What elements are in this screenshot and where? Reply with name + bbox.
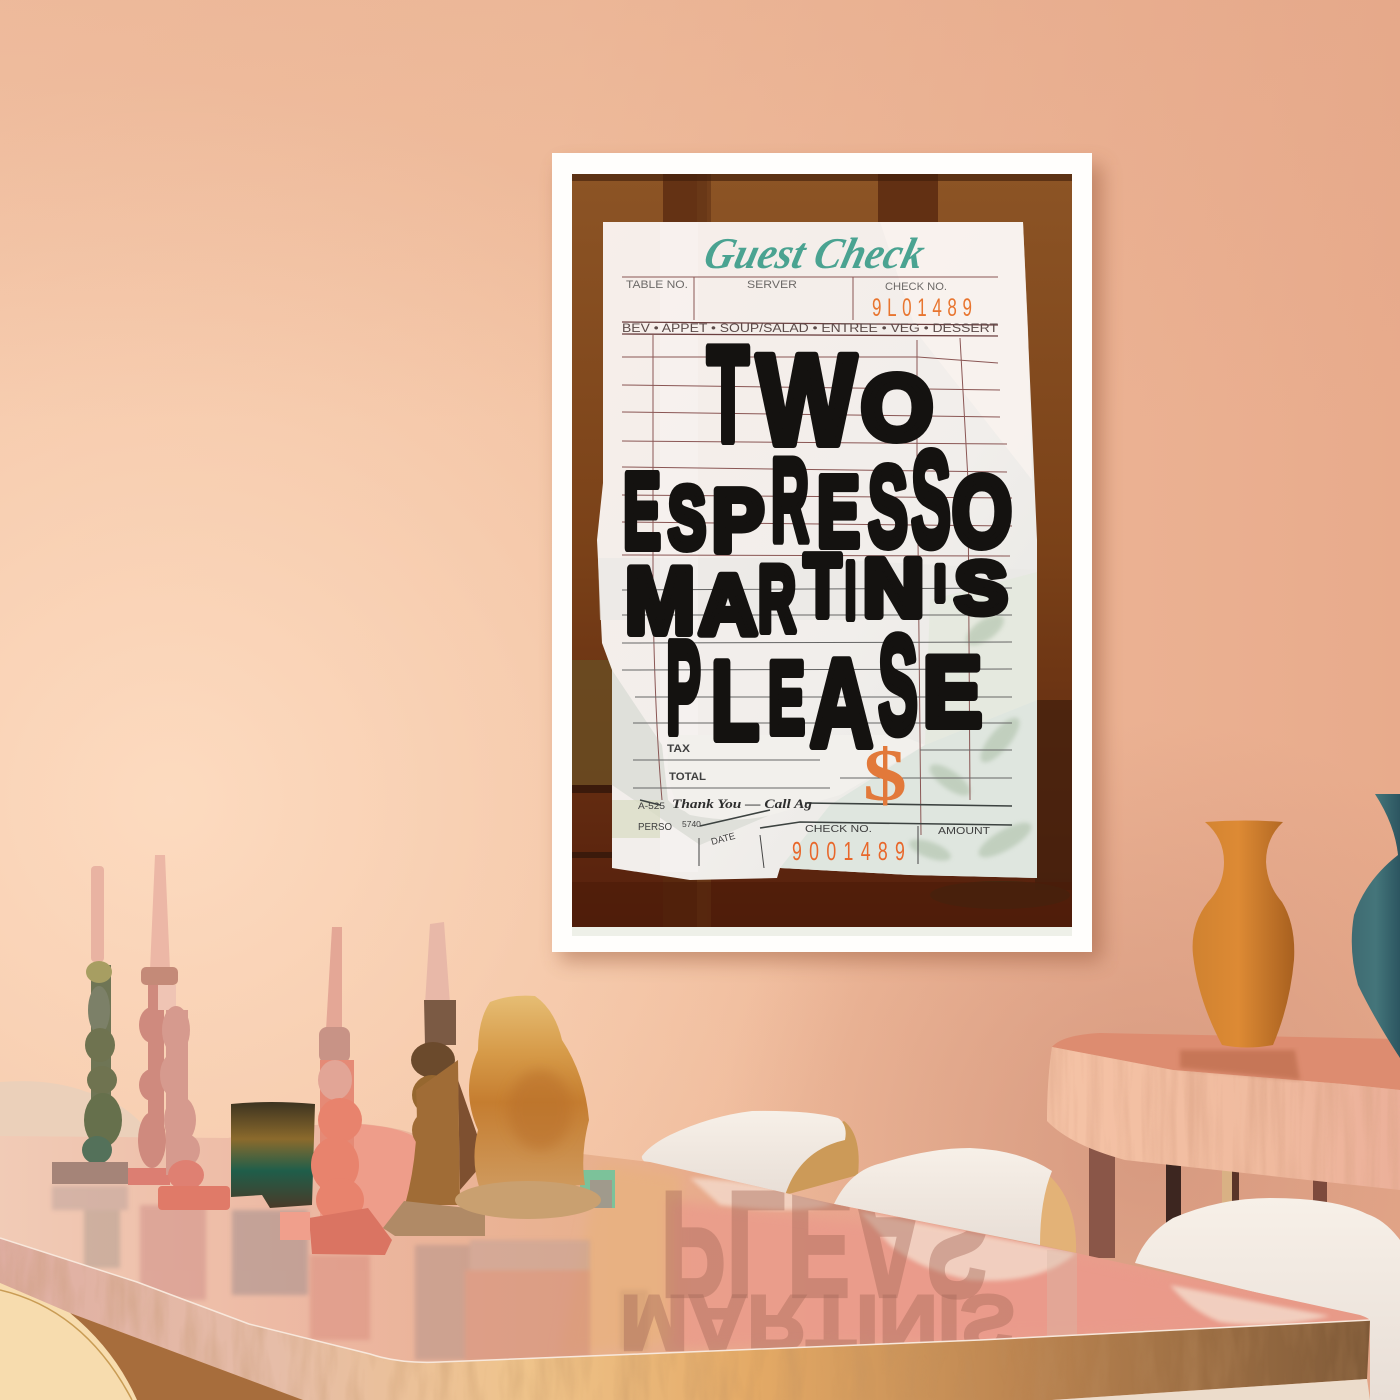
plant-tinted lower right — [780, 700, 1037, 878]
guest check heading: Guest Check — [700, 229, 930, 278]
candle — [158, 985, 176, 1010]
base — [383, 1201, 485, 1236]
hand lettering: MARTINIS: I — [845, 546, 856, 635]
candlestick: pink back — [128, 855, 178, 1185]
lower left curl — [612, 670, 770, 845]
white chair 2 — [834, 1148, 1076, 1253]
footer print: TAX — [667, 743, 691, 755]
teal vase — [1352, 794, 1400, 1058]
holder — [405, 1000, 486, 1205]
hand lettering: MARTINIS: R — [758, 546, 796, 651]
frame inner sill — [572, 927, 1072, 936]
holder — [82, 961, 122, 1164]
footer print: A-525 — [638, 801, 665, 811]
hand lettering: ESPRESSO: E — [817, 456, 860, 568]
candlestick: salmon — [280, 927, 392, 1255]
candle — [326, 927, 342, 1030]
footer print: 5740 — [682, 819, 701, 829]
white frame — [552, 153, 1092, 952]
hand lettering: TWO: O — [861, 357, 933, 459]
mirrored poster reflection: MARTINIS: MARTINIS — [620, 1279, 1015, 1367]
guest check paper — [597, 222, 1037, 880]
head — [469, 996, 589, 1190]
candlestick: green — [52, 866, 128, 1184]
footer print: TOTAL — [669, 771, 706, 783]
side table band — [1047, 1047, 1400, 1190]
hand lettering: TWO — [707, 318, 933, 472]
dollar sign: $ — [863, 735, 907, 817]
footer print — [638, 743, 991, 848]
hand lettering: ESPRESSO: P — [712, 471, 764, 570]
pink sheen behind objects — [320, 1124, 416, 1230]
check number top: 9L01489 — [872, 294, 972, 322]
candlestick: pink front — [158, 985, 230, 1210]
sculpted head candle — [455, 996, 615, 1219]
hand lettering: PLEASE: E — [768, 641, 805, 755]
candlestick: brown — [383, 922, 486, 1236]
hand lettering: ESPRESSO — [623, 423, 1012, 575]
check number bottom: 9001489 — [792, 837, 905, 866]
hand lettering: TWO: T — [707, 318, 749, 470]
candle — [150, 855, 170, 970]
hand lettering: MARTINIS: I — [935, 558, 945, 611]
holder — [160, 1006, 204, 1190]
hand lettering: PLEASE: L — [711, 639, 759, 763]
footer print: Thank You — Call Ag — [672, 796, 813, 811]
header labels: BEV • APPET • SOUP/SALAD • ENTREE • VEG • DESSERT — [622, 323, 998, 335]
white chair 1 — [642, 1111, 859, 1195]
poster backdrop — [572, 174, 1072, 930]
base — [309, 1208, 392, 1255]
footer print: AMOUNT — [938, 825, 991, 837]
hand lettering: PLEASE — [666, 606, 982, 773]
candle — [425, 922, 450, 1004]
mirrored poster reflection: PLEAS: PLEAS — [660, 1159, 990, 1329]
footer print: CHECK NO. — [805, 823, 872, 835]
printed rules — [622, 277, 1012, 868]
side table legs — [1089, 1140, 1327, 1258]
hand lettering: PLEASE: A — [810, 635, 873, 773]
hand lettering: ESPRESSO: R — [771, 435, 809, 567]
hand lettering: PLEASE: P — [666, 614, 701, 761]
object reflections — [52, 1186, 648, 1362]
hand lettering: MARTINIS: T — [804, 536, 841, 635]
white chair 3 — [1135, 1198, 1400, 1400]
cup — [319, 1027, 350, 1063]
header labels: SERVER — [747, 279, 797, 291]
upper crease shading — [880, 222, 1032, 480]
hand lettering: ESPRESSO: S — [868, 444, 908, 571]
side table — [1040, 1033, 1400, 1195]
hand lettering: MARTINIS: A — [699, 558, 757, 652]
base — [128, 1168, 170, 1185]
dining table top — [0, 1124, 1370, 1367]
base — [158, 1186, 230, 1210]
green block — [580, 1170, 615, 1208]
orange vase — [1193, 820, 1294, 1048]
dining table front edge — [0, 1230, 1400, 1400]
hand lettering: MARTINIS: S — [955, 549, 1007, 629]
hand lettering: ESPRESSO: O — [952, 456, 1012, 568]
holder — [138, 967, 178, 1168]
hand lettering: ESPRESSO: S — [911, 423, 951, 575]
footer print: DATE — [710, 831, 737, 848]
hand lettering: PLEASE: E — [923, 636, 982, 747]
framed poster — [552, 153, 1102, 961]
footer print: PERSO — [638, 821, 672, 833]
hand lettering: PLEASE: S — [878, 606, 918, 763]
bottom left chair and table base — [0, 1283, 303, 1400]
hand lettering: ESPRESSO: E — [623, 450, 661, 571]
header labels: TABLE NO. — [626, 279, 688, 291]
left background chair — [0, 1081, 143, 1138]
base — [455, 1181, 601, 1219]
hand lettering: MARTINIS — [625, 536, 1007, 653]
frame shadow — [560, 165, 1102, 961]
hand lettering: MARTINIS: M — [625, 548, 695, 653]
under-table sliver of chair — [1052, 1379, 1370, 1400]
side table top surface — [1052, 1033, 1400, 1090]
hand lettering: TWO: W — [757, 329, 856, 472]
header labels — [622, 279, 998, 335]
holder — [311, 1060, 364, 1222]
base — [52, 1162, 128, 1184]
reflected frame stripe — [1047, 1250, 1077, 1340]
header labels: CHECK NO. — [885, 281, 947, 293]
hand lettering: ESPRESSO: S — [668, 468, 706, 567]
candle — [91, 866, 104, 962]
hand lettering: MARTINIS: N — [863, 543, 924, 634]
dark ceramic cup — [231, 1102, 315, 1208]
chair reflections — [690, 1178, 834, 1210]
